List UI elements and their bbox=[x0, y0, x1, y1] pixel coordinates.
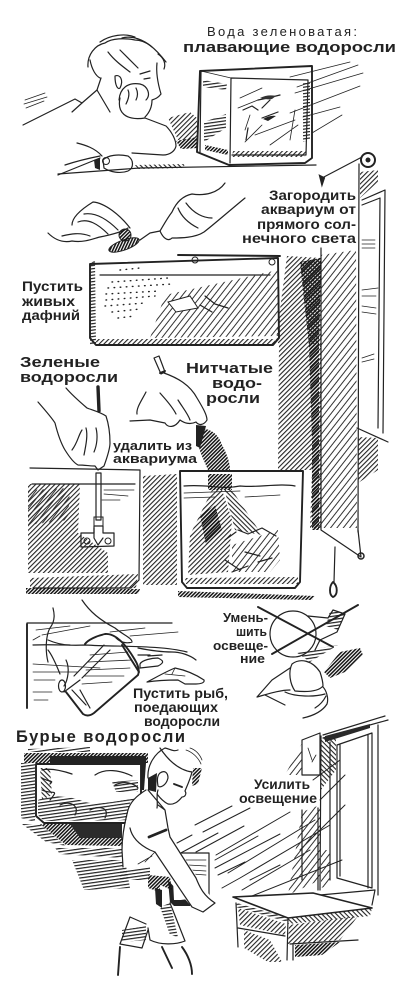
illustration: aquarium with sun rays bbox=[197, 62, 363, 165]
heading: brown algae: Бурые водоросли bbox=[16, 728, 185, 746]
label: reduce light: освеще- bbox=[213, 638, 268, 653]
heading: green algae: водоросли bbox=[20, 369, 118, 386]
label: add fish that eat algae bbox=[133, 686, 228, 729]
illustration: aquarium with brown algae bbox=[21, 747, 148, 890]
label: block the sunlight bbox=[242, 188, 357, 246]
illustration: aquarium with daphnia bbox=[90, 255, 280, 345]
illustration: boy carrying aquarium bbox=[118, 748, 215, 975]
label: increase light: Усилить bbox=[254, 776, 310, 792]
label: add fish that eat algae: водоросли bbox=[144, 714, 220, 729]
label: reduce light bbox=[213, 610, 268, 666]
label: increase light: освещение bbox=[239, 790, 317, 806]
label: block the sunlight: аквариум от bbox=[261, 202, 356, 217]
illustration: bulb crossed out bbox=[258, 605, 358, 662]
label: block the sunlight: прямого сол- bbox=[257, 217, 356, 232]
heading: green algae: Зеленые bbox=[20, 354, 100, 371]
illustration: sun rays from window bbox=[177, 760, 345, 900]
label: add fish that eat algae: поедающих bbox=[134, 700, 219, 715]
held aquarium bbox=[168, 853, 209, 906]
heading: floating algae: Вода зеленоватая: bbox=[207, 24, 357, 39]
heading: green algae bbox=[20, 354, 118, 386]
heading: floating algae bbox=[183, 24, 396, 56]
label: add fish that eat algae: Пустить рыб, bbox=[133, 686, 228, 701]
heading: filamentous algae: водо- bbox=[212, 375, 262, 392]
illustration: window with curtains bbox=[285, 716, 388, 905]
illustration: pouring fish into aquarium bbox=[27, 600, 204, 715]
label: reduce light: шить bbox=[236, 624, 267, 639]
heading: filamentous algae: Нитчатые bbox=[186, 360, 273, 377]
label: add live daphnia: живых bbox=[21, 293, 75, 309]
heading: filamentous algae: росли bbox=[206, 390, 260, 407]
illustration: hand with scraper bbox=[38, 387, 110, 470]
label: reduce light: ние bbox=[240, 651, 265, 666]
illustration: aquarium with scraper bbox=[26, 468, 140, 594]
label: block the sunlight: нечного света bbox=[242, 231, 357, 246]
label: add live daphnia bbox=[21, 278, 83, 323]
illustration: table under window bbox=[233, 893, 372, 962]
illustration: boy watching aquarium bbox=[23, 35, 316, 175]
label: remove from aquarium bbox=[113, 438, 198, 466]
label: reduce light: Умень- bbox=[223, 610, 268, 625]
illustration: hand pulling thread algae bbox=[130, 356, 230, 470]
label: block the sunlight: Загородить bbox=[269, 188, 356, 203]
illustration: hands with daphnia net bbox=[48, 183, 245, 255]
illustration: aquarium with thread algae bbox=[178, 471, 315, 600]
label: remove from aquarium: удалить из bbox=[113, 438, 193, 453]
label: add live daphnia: Пустить bbox=[22, 278, 83, 294]
illustration: window blind and wall bbox=[143, 153, 388, 597]
label: increase light bbox=[239, 776, 317, 806]
illustration: hand with light bulb bbox=[257, 648, 363, 718]
label: add live daphnia: дафний bbox=[22, 307, 80, 323]
heading: filamentous algae bbox=[186, 360, 273, 407]
heading: floating algae: плавающие водоросли bbox=[183, 39, 396, 56]
label: remove from aquarium: аквариума bbox=[113, 451, 198, 466]
